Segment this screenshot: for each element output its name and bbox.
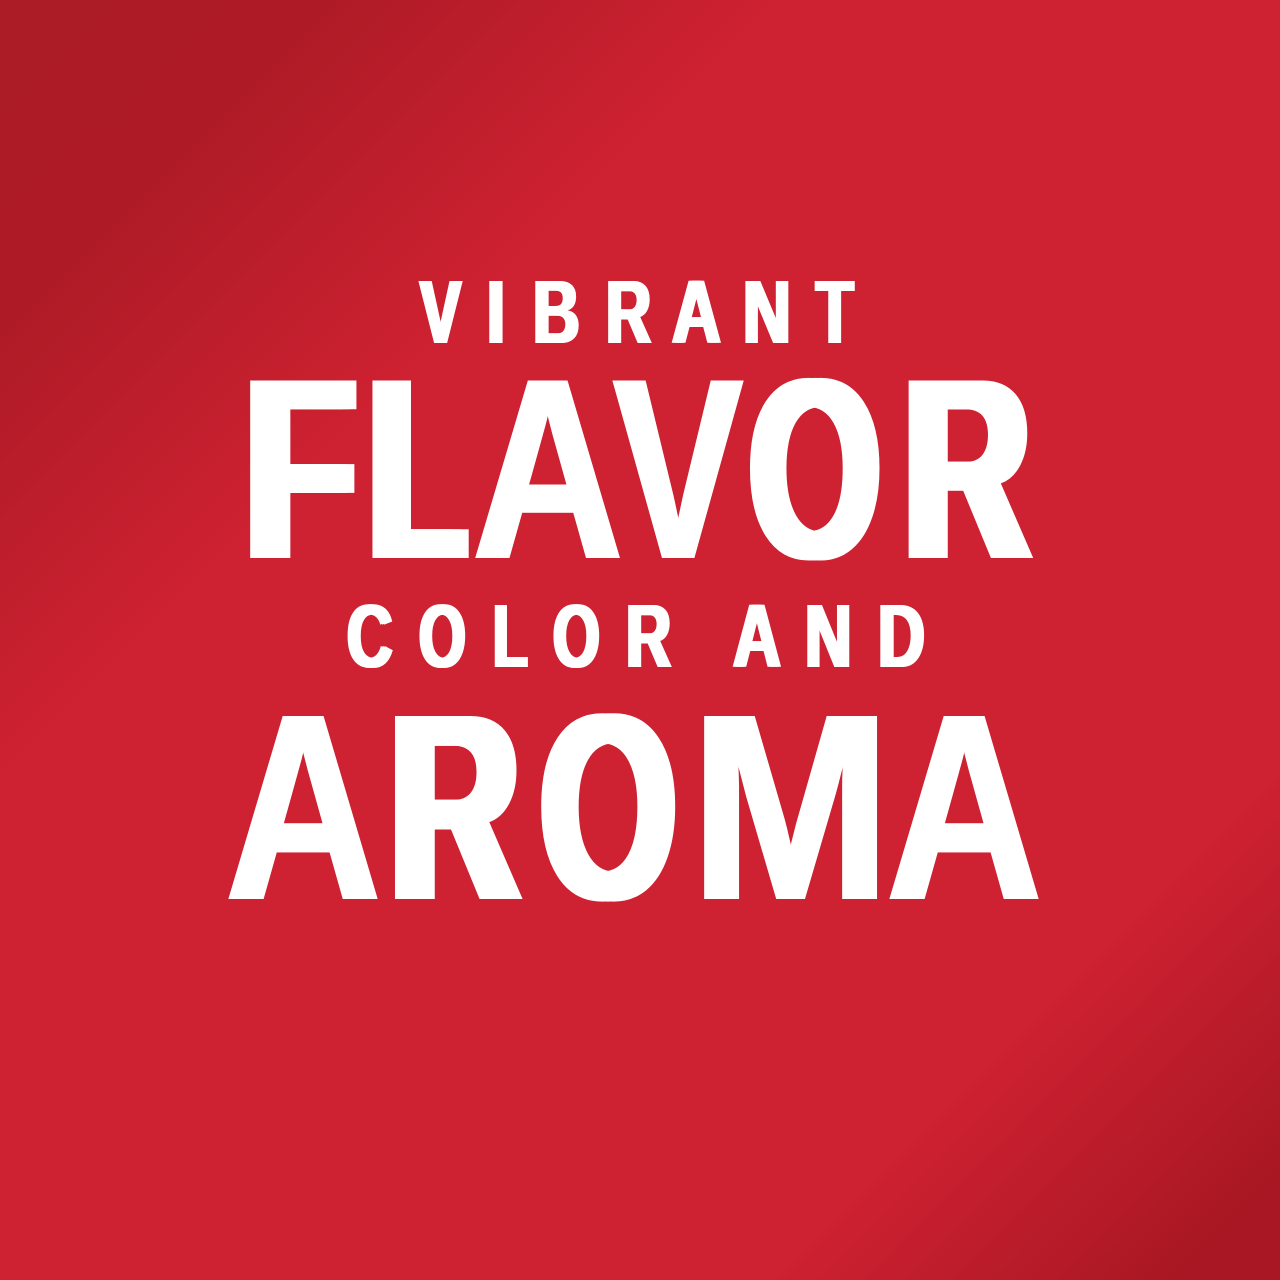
- text: FLAVOR: F: [245, 324, 356, 613]
- text: VIBRANT: I: [487, 263, 505, 363]
- text: AROMA: R: [390, 659, 520, 956]
- text: COLOR AND: D: [878, 587, 925, 687]
- text: VIBRANT: V: [420, 263, 461, 363]
- text: FLAVOR: V: [613, 324, 743, 613]
- text: VIBRANT: T: [816, 263, 853, 363]
- text: AROMA: A: [225, 659, 382, 956]
- text: COLOR AND: O: [553, 587, 599, 687]
- text: COLOR AND: [347, 587, 925, 687]
- heading: vibrant flavor color and aroma: [225, 263, 1043, 956]
- text: VIBRANT: N: [743, 263, 791, 363]
- text: COLOR AND: O: [419, 587, 465, 687]
- text: COLOR AND: A: [732, 587, 780, 687]
- text: COLOR AND: C: [347, 587, 393, 687]
- text: FLAVOR: L: [370, 324, 466, 613]
- text: AROMA: A: [886, 659, 1043, 956]
- text: FLAVOR: [245, 324, 1034, 902]
- text: VIBRANT: B: [532, 263, 579, 363]
- text: VIBRANT: R: [606, 263, 651, 363]
- text: COLOR AND: N: [805, 587, 851, 687]
- text: VIBRANT: A: [672, 263, 721, 363]
- text: VIBRANT: [418, 263, 855, 363]
- text: AROMA: [225, 659, 1043, 956]
- text: COLOR AND: R: [626, 587, 671, 687]
- text: FLAVOR: R: [904, 324, 1029, 613]
- text: AROMA: M: [690, 659, 892, 956]
- text: AROMA: O: [540, 659, 677, 956]
- text: COLOR AND: L: [493, 587, 528, 687]
- text: FLAVOR: O: [749, 324, 880, 613]
- text: FLAVOR: A: [472, 324, 623, 613]
